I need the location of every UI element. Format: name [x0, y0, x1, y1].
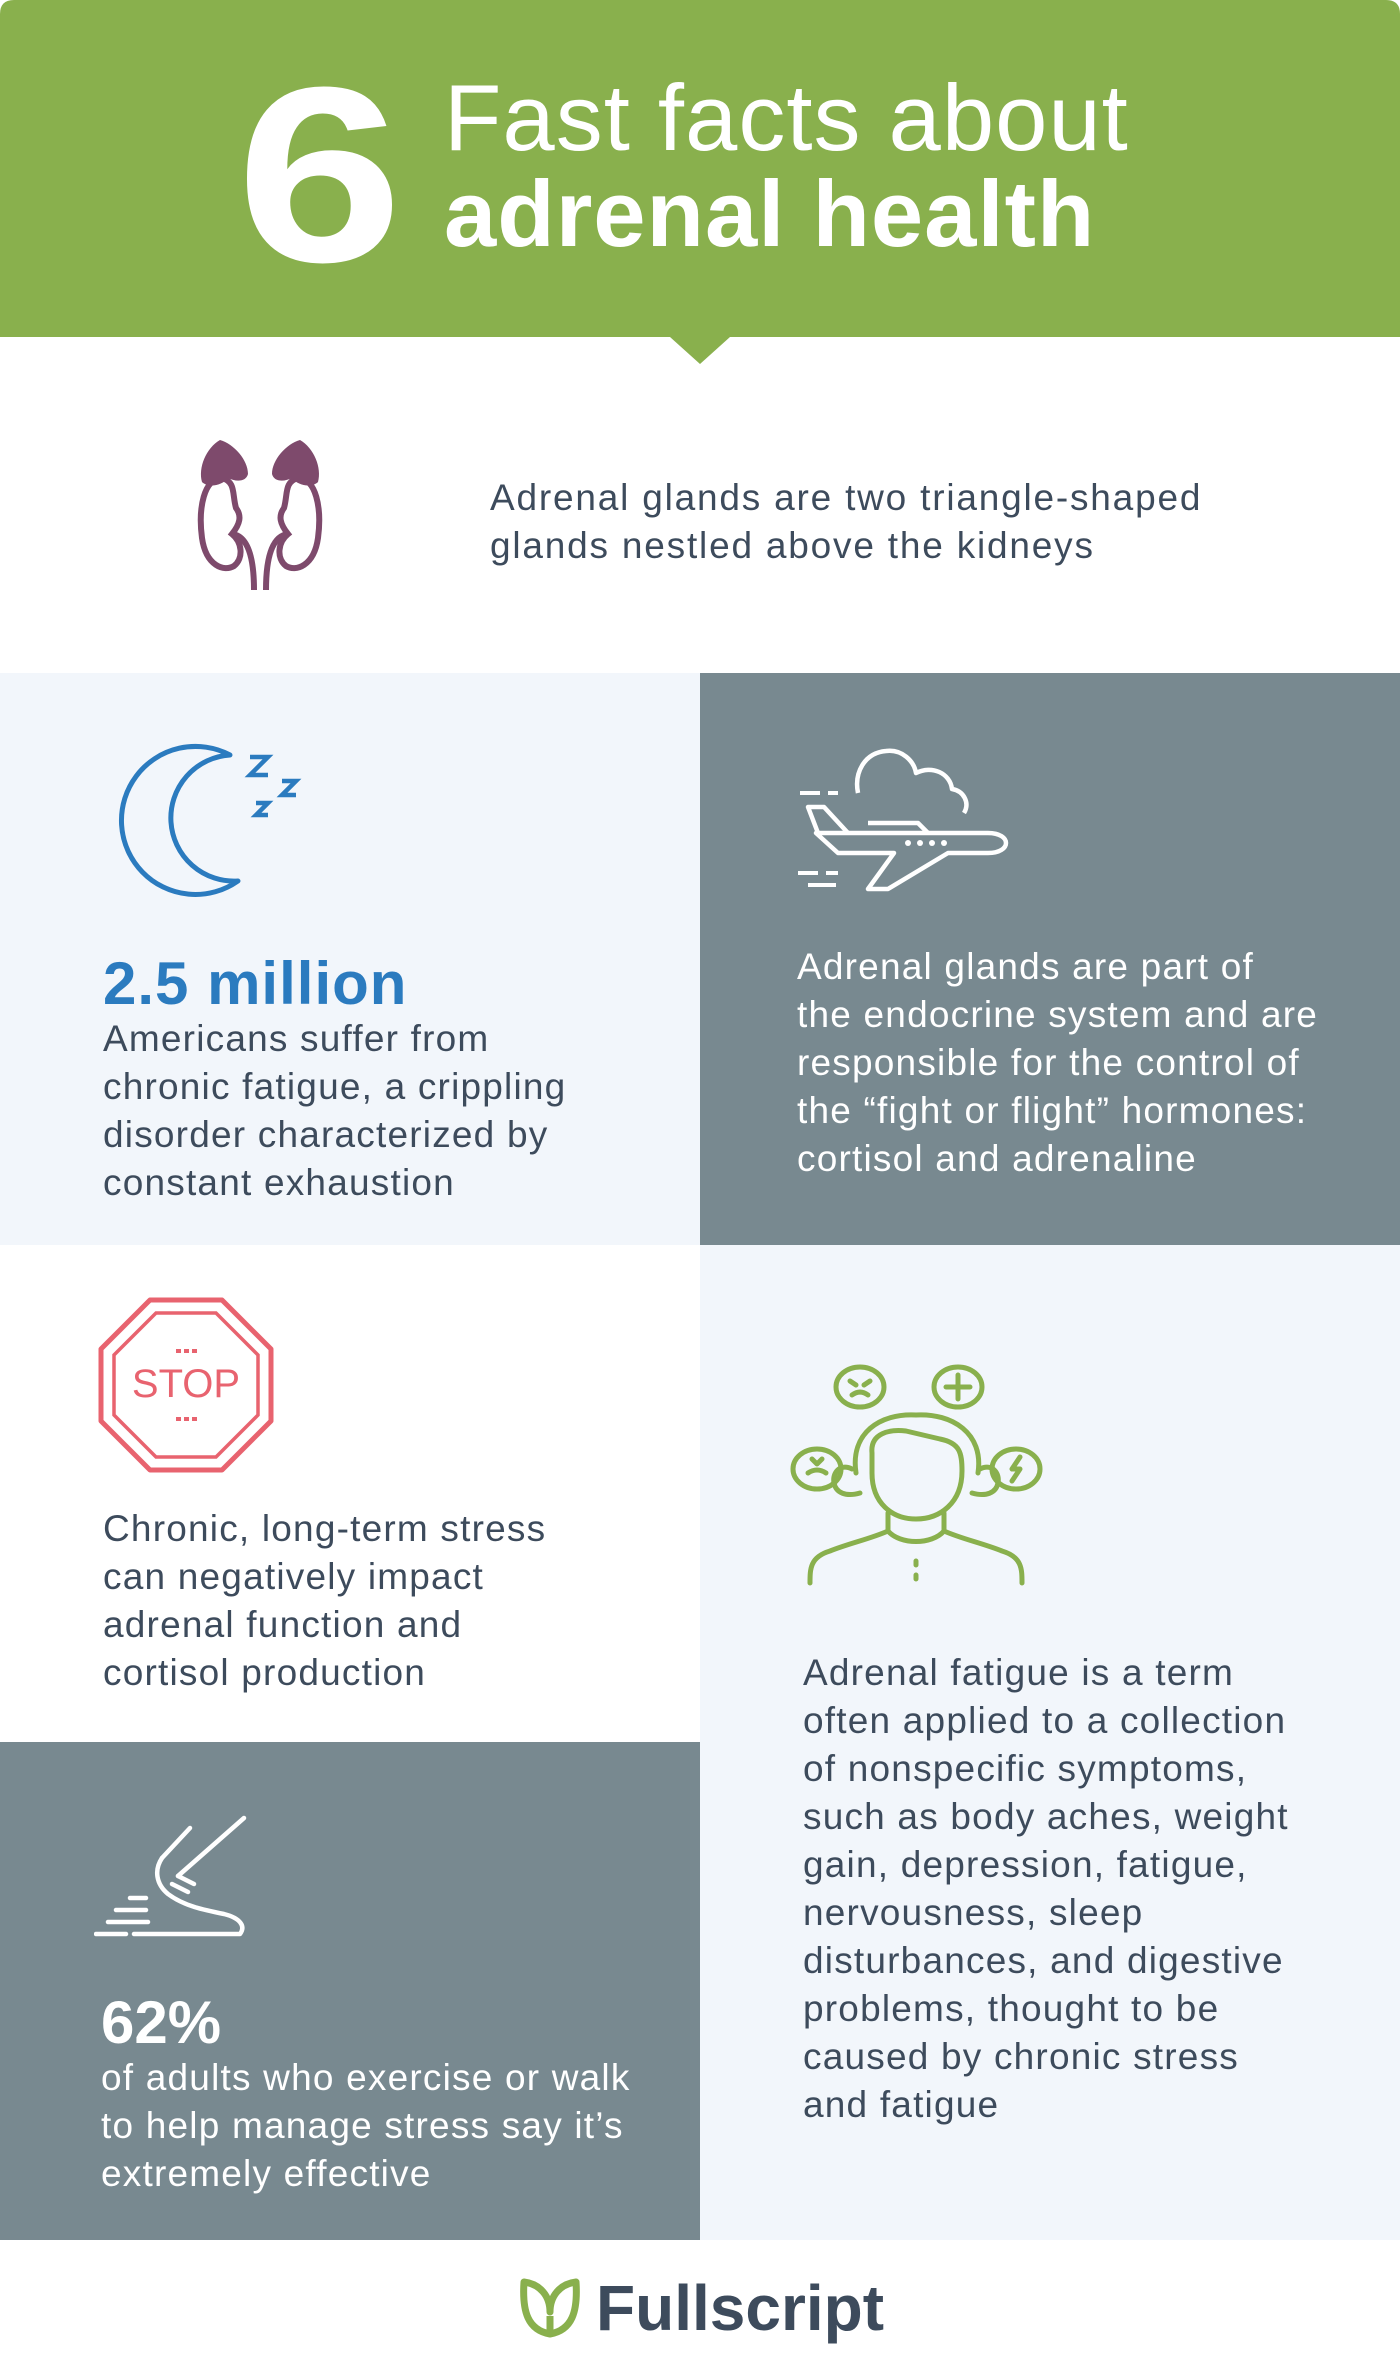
stat: 62%: 62%: [101, 1989, 221, 2056]
text: chronic fatigue: [103, 1018, 566, 1203]
text: endocrine system: Adrenal glands are part of: [797, 946, 1254, 987]
text: chronic stress: Chronic, long-term stress: [103, 1508, 546, 1549]
footer logo: [520, 2272, 884, 2344]
text: adrenal fatigue description: caused by chronic stress: [803, 2036, 1239, 2077]
text: adrenal fatigue description: often applied to a collection: [803, 1700, 1286, 1741]
text: adrenal glands intro: Adrenal glands are two triangle-shaped: [490, 477, 1202, 518]
text: adrenal fatigue description: nervousness, sleep: [803, 1892, 1143, 1933]
icon: stop sign: STOP: [132, 1362, 240, 1406]
text: adrenal glands intro: glands nestled above the kidneys: [490, 525, 1095, 566]
panel: stress: [0, 1245, 700, 1742]
text: adrenal glands intro: [490, 477, 1202, 566]
text: adrenal fatigue description: and fatigue: [803, 2084, 999, 2125]
panel: 2.5 million: [0, 673, 700, 1245]
title number: 6: [236, 35, 403, 314]
text: chronic fatigue: chronic fatigue, a crippling: [103, 1066, 566, 1107]
icon: stop sign: [98, 1298, 274, 1472]
text: adrenal fatigue description: disturbances, and digestive: [803, 1940, 1284, 1981]
text: endocrine system: the “fight or flight” hormones:: [797, 1090, 1307, 1131]
icon: moon: [118, 744, 302, 897]
text: adrenal fatigue description: of nonspecific symptoms,: [803, 1748, 1247, 1789]
text: adrenal fatigue description: [803, 1652, 1289, 2125]
text: chronic stress: can negatively impact: [103, 1556, 484, 1597]
panel: exercise: [0, 1742, 700, 2240]
text: chronic stress: cortisol production: [103, 1652, 426, 1693]
text: adrenal fatigue description: gain, depression, fatigue,: [803, 1844, 1248, 1885]
text: adrenal fatigue description: problems, thought to be: [803, 1988, 1219, 2029]
text: endocrine system: the endocrine system and are: [797, 994, 1318, 1035]
text: chronic fatigue: disorder characterized by: [103, 1114, 548, 1155]
text: exercise: of adults who exercise or walk: [101, 2057, 631, 2098]
text: endocrine system: cortisol and adrenaline: [797, 1138, 1197, 1179]
header banner: [0, 0, 1400, 364]
stat: 2.5 million: 2.5 million: [103, 950, 407, 1017]
title text: Fast facts about: [444, 65, 1129, 170]
text: endocrine system: [797, 946, 1318, 1179]
icon: running shoe: [94, 1816, 246, 1936]
text: adrenal fatigue description: Adrenal fatigue is a term: [803, 1652, 1234, 1693]
icon: leaf: [520, 2278, 580, 2338]
text: chronic fatigue: constant exhaustion: [103, 1162, 455, 1203]
panel: adrenal fatigue: [700, 1245, 1400, 2240]
icon: plane and cloud: [798, 748, 1008, 892]
text: endocrine system: responsible for the control of: [797, 1042, 1300, 1083]
text: adrenal fatigue description: such as body aches, weight: [803, 1796, 1289, 1837]
brand name: Fullscript: [596, 2272, 884, 2344]
text: chronic stress: adrenal function and: [103, 1604, 462, 1645]
text: exercise: to help manage stress say it’s: [101, 2105, 624, 2146]
text: chronic stress: [103, 1508, 546, 1693]
text: chronic fatigue: Americans suffer from: [103, 1018, 489, 1059]
text: exercise: [101, 2057, 631, 2194]
icon: kidneys: [198, 440, 322, 590]
icon: person with symptoms: [790, 1364, 1042, 1586]
text: exercise: extremely effective: [101, 2153, 432, 2194]
title text: [444, 65, 1129, 266]
panel: endocrine: [700, 673, 1400, 1245]
title text: adrenal health: [444, 161, 1095, 266]
